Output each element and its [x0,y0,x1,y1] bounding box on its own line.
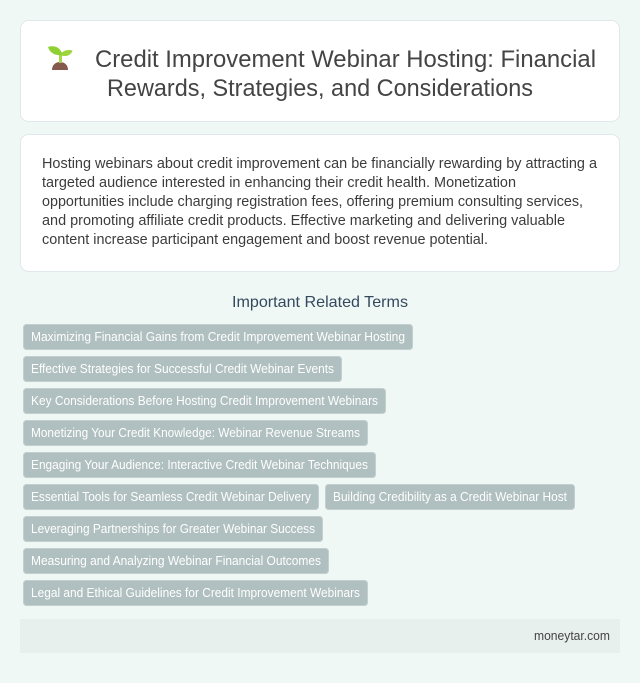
tag 9: Measuring and Analyzing Webinar Financial Outcomes [31,554,321,568]
title: Rewards, Strategies, and Considerations [107,75,533,102]
footer: moneytar.com [534,629,610,643]
panel: intro paragraph [20,134,620,272]
tag 9 [24,548,328,574]
tag 6: Essential Tools for Seamless Credit Webinar Delivery [31,490,312,504]
tag 7 [326,484,574,510]
tag 2 [24,356,342,382]
tag 10: Legal and Ethical Guidelines for Credit Improvement Webinars [31,586,360,600]
tag 5 [24,452,376,478]
tag 7: Building Credibility as a Credit Webinar Host [333,490,567,504]
tag 1: Maximizing Financial Gains from Credit Improvement Webinar Hosting [31,330,405,344]
tag 10 [24,580,368,606]
tag 8 [24,516,322,542]
text block: description: targeted audience interested in enhancing their credit health. Monetization [42,175,516,191]
tag list [24,324,574,606]
title: Credit Improvement Webinar Hosting: Financial [95,46,596,73]
text block: description: Hosting webinars about credit improvement can be financially rewarding by attracting a [42,156,598,172]
title [95,46,596,102]
tag 4: Monetizing Your Credit Knowledge: Webinar Revenue Streams [31,426,360,440]
text block: description [42,156,598,248]
footer [20,619,620,653]
tag 1 [24,324,412,350]
icon: seedling [48,46,72,70]
text block: description: content increase participant engagement and boost revenue potential. [42,232,488,248]
heading: important related terms: Important Related Terms [232,294,408,311]
tag 6 [24,484,318,510]
tag 3 [24,388,386,414]
tag 3: Key Considerations Before Hosting Credit Improvement Webinars [31,394,378,408]
text block: description: and promoting affiliate credit products. Effective marketing and delivering valuable [42,213,565,229]
tag 2: Effective Strategies for Successful Credit Webinar Events [31,362,334,376]
tag 4 [24,420,368,446]
text block: description: opportunities include charging registration fees, offering premium consulting services, [42,194,583,210]
tag 5: Engaging Your Audience: Interactive Credit Webinar Techniques [31,458,368,472]
panel: title header [20,20,620,122]
tag 8: Leveraging Partnerships for Greater Webinar Success [31,522,315,536]
